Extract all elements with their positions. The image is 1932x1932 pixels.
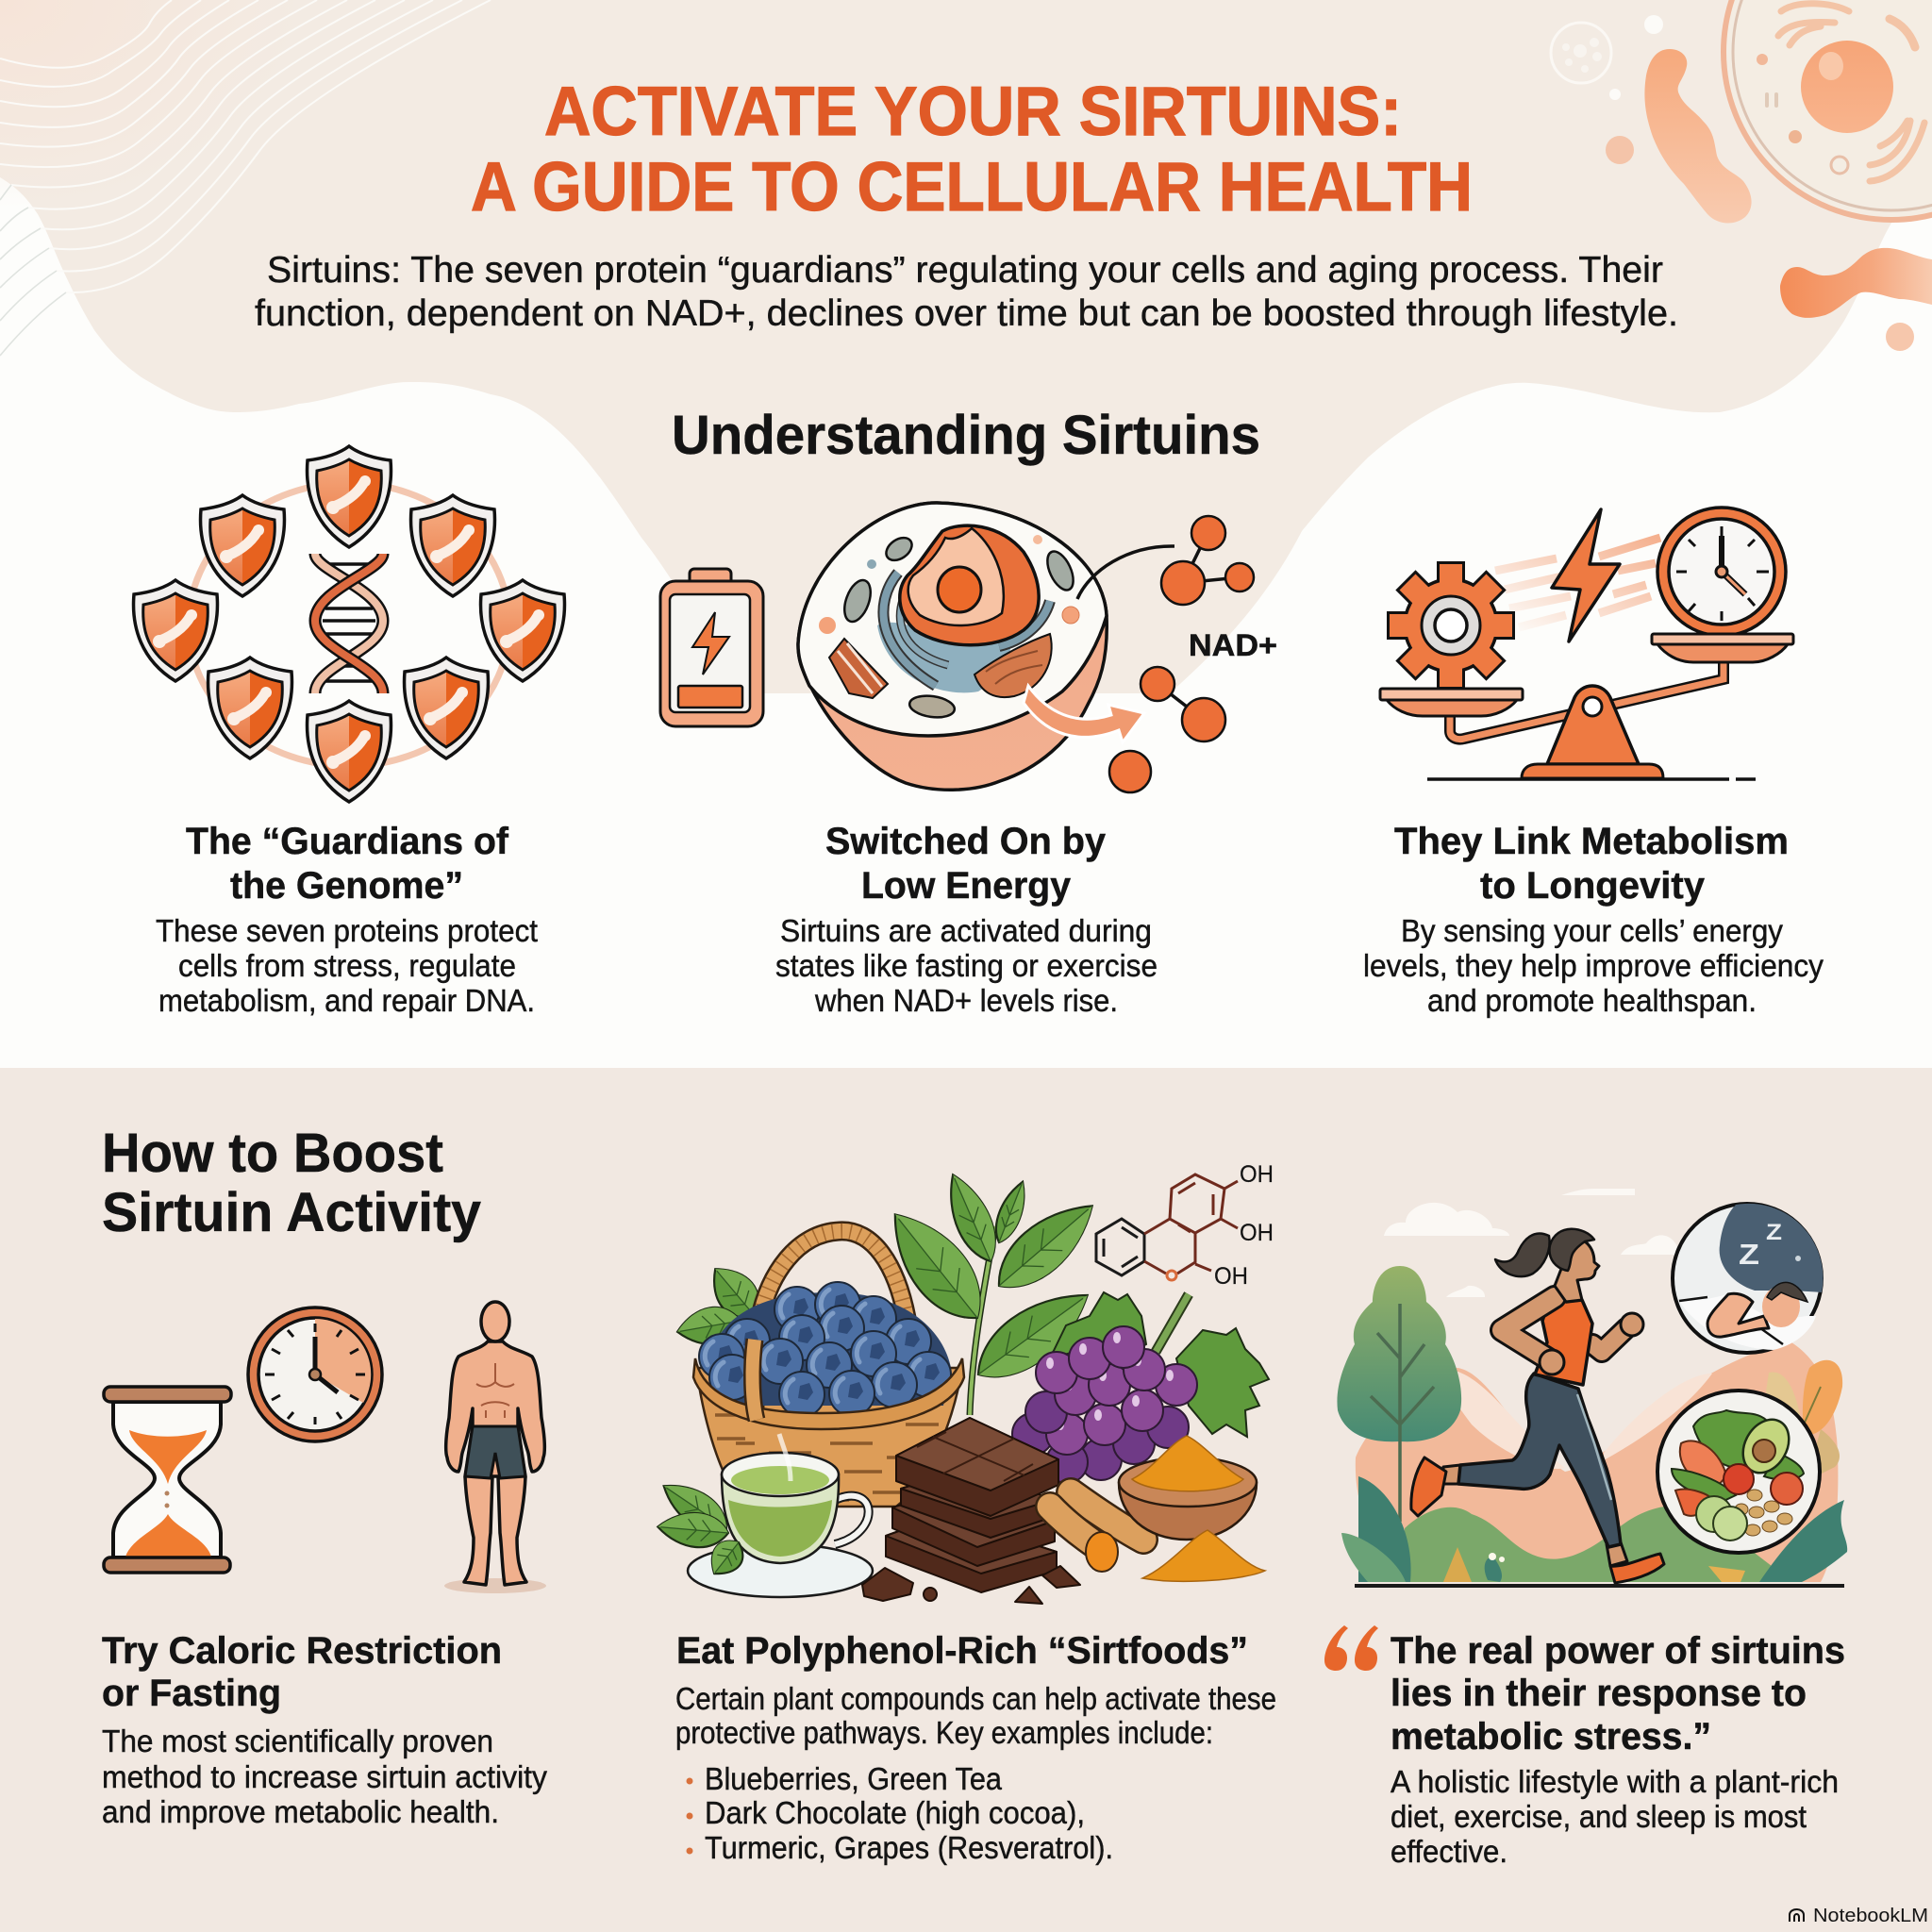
- icon: hourglass: [104, 1387, 231, 1573]
- runner: [1411, 1229, 1664, 1583]
- icon: low battery: [660, 569, 763, 726]
- column: switched on by low energy: Low Energy: [861, 865, 1072, 907]
- callout: quote text: [1391, 1630, 1845, 1869]
- decorative cell illustration top right: [1551, 0, 1932, 351]
- column: guardians of the genome: [156, 821, 538, 1018]
- column: caloric restriction text: and improve metabolic health.: [102, 1794, 499, 1829]
- heading: understanding sirtuins: Understanding Sirtuins: [672, 405, 1260, 466]
- polyphenol molecule: [1096, 1161, 1274, 1290]
- label: NAD+: NAD+: [1189, 628, 1277, 662]
- column: link metabolism to longevity: to Longevity: [1480, 865, 1706, 907]
- intro paragraph: Sirtuins: The seven protein “guardians” regulating your cells and aging process. Their: [267, 250, 1663, 291]
- callout: quote text: diet, exercise, and sleep is most: [1391, 1799, 1807, 1834]
- icon: fasting clock: [248, 1307, 382, 1441]
- column: guardians of the genome: cells from stress, regulate: [178, 948, 516, 983]
- quote mark: [1324, 1625, 1378, 1671]
- column: guardians of the genome: metabolism, and repair DNA.: [158, 983, 535, 1018]
- icon: cell cross-section: [798, 503, 1174, 790]
- icon: NAD+ molecules: [1109, 516, 1254, 792]
- column: caloric restriction text: method to increase sirtuin activity: [102, 1759, 547, 1794]
- column: switched on by low energy: Switched On by: [825, 821, 1107, 862]
- grapes: [1012, 1294, 1197, 1483]
- intro paragraph: function, dependent on NAD+, declines over time but can be boosted through lifestyle.: [255, 293, 1678, 334]
- heading: how to boost sirtuin activity: How to Boost: [102, 1123, 443, 1184]
- icon: shields around DNA: [134, 446, 564, 802]
- grape leaves: [1050, 1292, 1269, 1437]
- callout: quote text: effective.: [1391, 1834, 1507, 1869]
- green tea cup: [655, 1434, 873, 1597]
- icon: balance with gear, bolt and clock: [1380, 508, 1793, 779]
- column: sirtfoods text: [675, 1630, 1276, 1865]
- column: sirtfoods text: protective pathways. Key examples include:: [675, 1715, 1213, 1750]
- icon: standing person: [444, 1302, 546, 1593]
- column: link metabolism to longevity: levels, they help improve efficiency: [1363, 948, 1824, 983]
- illustration: holistic lifestyle runner: [1337, 1189, 1847, 1586]
- column: link metabolism to longevity: [1363, 821, 1824, 1018]
- column: switched on by low energy: states like fasting or exercise: [775, 948, 1158, 983]
- sleep badge: [1673, 1204, 1823, 1353]
- ground foliage: [1341, 1476, 1847, 1582]
- sleep badge: Z: [1739, 1238, 1759, 1271]
- title: ACTIVATE YOUR SIRTUINS:: [544, 74, 1402, 150]
- column: guardians of the genome: the Genome”: [230, 865, 463, 907]
- ground line: [1355, 1584, 1844, 1588]
- balanced meal plate: [1657, 1391, 1820, 1553]
- callout: quote text: A holistic lifestyle with a plant-rich: [1391, 1764, 1839, 1799]
- column: sirtfoods text: Turmeric, Grapes (Resveratrol).: [705, 1830, 1113, 1865]
- column: guardians of the genome: These seven proteins protect: [156, 913, 538, 948]
- column: link metabolism to longevity: By sensing your cells’ energy: [1401, 913, 1783, 948]
- column: switched on by low energy: when NAD+ levels rise.: [814, 983, 1118, 1018]
- title: A GUIDE TO CELLULAR HEALTH: [471, 149, 1473, 225]
- sleep badge: Z: [1766, 1220, 1782, 1245]
- decorative contour lines: [0, 0, 491, 356]
- title: [471, 74, 1473, 225]
- callout: quote text: The real power of sirtuins: [1391, 1630, 1845, 1672]
- column: switched on by low energy: [775, 821, 1158, 1018]
- polyphenol molecule: OH: [1240, 1161, 1274, 1188]
- logo: NotebookLM: NotebookLM: [1813, 1906, 1928, 1926]
- intro paragraph: [255, 250, 1678, 334]
- heading: how to boost sirtuin activity: [102, 1123, 481, 1243]
- column: link metabolism to longevity: They Link Metabolism: [1394, 821, 1789, 862]
- hills: [1356, 1342, 1838, 1582]
- turmeric bowl and root: [1050, 1436, 1265, 1581]
- column: caloric restriction text: Try Caloric Restriction: [102, 1630, 502, 1672]
- column: sirtfoods text: Eat Polyphenol-Rich “Sirtfoods”: [676, 1630, 1248, 1672]
- polyphenol molecule: OH: [1240, 1220, 1274, 1246]
- column: link metabolism to longevity: and promote healthspan.: [1427, 983, 1757, 1018]
- column: guardians of the genome: The “Guardians of: [186, 821, 509, 862]
- basket with blueberries: [675, 1231, 964, 1507]
- illustration: polyphenol-rich foods: [655, 1161, 1274, 1604]
- column: caloric restriction text: [102, 1630, 547, 1829]
- callout: quote text: metabolic stress.”: [1391, 1716, 1711, 1757]
- column: switched on by low energy: Sirtuins are activated during: [780, 913, 1152, 948]
- header wave background: [0, 0, 1932, 693]
- callout: quote text: lies in their response to: [1391, 1673, 1807, 1714]
- background leaves right: [1766, 1360, 1842, 1481]
- column: sirtfoods text: Dark Chocolate (high cocoa),: [705, 1795, 1085, 1830]
- heading: how to boost sirtuin activity: Sirtuin Activity: [102, 1182, 481, 1243]
- column: sirtfoods text: Certain plant compounds can help activate these: [675, 1681, 1276, 1716]
- clouds: [1384, 1189, 1680, 1297]
- dark chocolate stack: [862, 1418, 1080, 1604]
- column: sirtfoods text: Blueberries, Green Tea: [705, 1761, 1003, 1796]
- polyphenol molecule: OH: [1214, 1263, 1248, 1290]
- tree: [1337, 1266, 1461, 1522]
- column: caloric restriction text: or Fasting: [102, 1673, 281, 1714]
- panel: how to boost background: [0, 1068, 1932, 1932]
- column: caloric restriction text: The most scientifically proven: [102, 1724, 493, 1758]
- pale hill highlights: [1443, 1370, 1712, 1469]
- tea plant: [874, 1168, 1108, 1415]
